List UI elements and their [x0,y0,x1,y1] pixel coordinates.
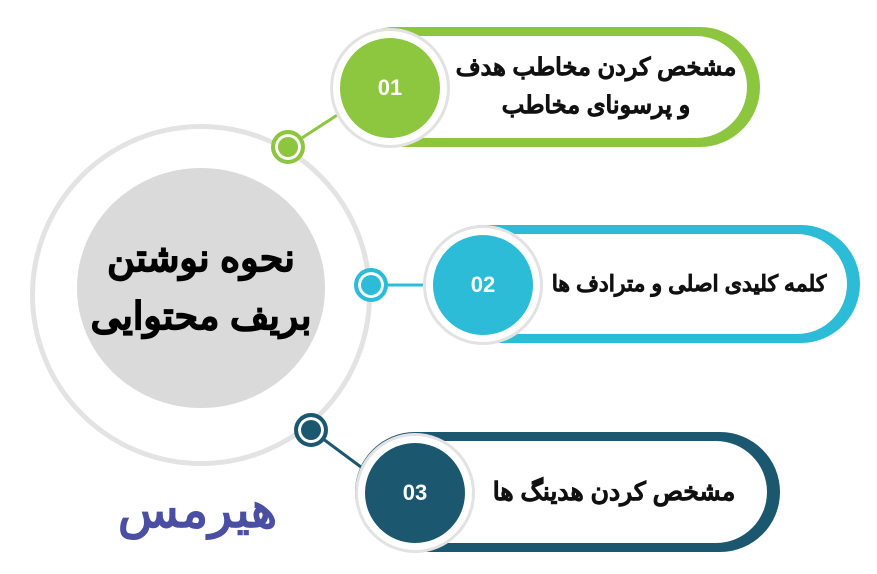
logo: هیرمس [118,482,277,538]
dot 2 [354,268,388,302]
step 1: مشخص کردن مخاطب هدف [456,54,736,81]
step 1: و پرسونای مخاطب [502,92,690,119]
number 02: 02 [471,272,495,297]
number 01 [340,38,440,138]
number 03 [365,443,465,543]
step 2: کلمه کلیدی اصلی و مترادف ها [552,271,826,296]
central title disc [77,168,325,408]
dot 1 [271,130,305,164]
dot 3 [294,413,328,447]
number 01: 01 [378,75,402,100]
step 3: مشخص کردن هدینگ ها [493,478,735,506]
outer ring [30,124,372,466]
step 1 [335,27,760,147]
central title disc: نحوه نوشتن [107,238,295,280]
central title disc: بریف محتوایی [91,296,311,338]
number 02 [433,235,533,335]
number 03: 03 [403,480,427,505]
step 3 [355,432,780,552]
step 2 [425,225,860,343]
